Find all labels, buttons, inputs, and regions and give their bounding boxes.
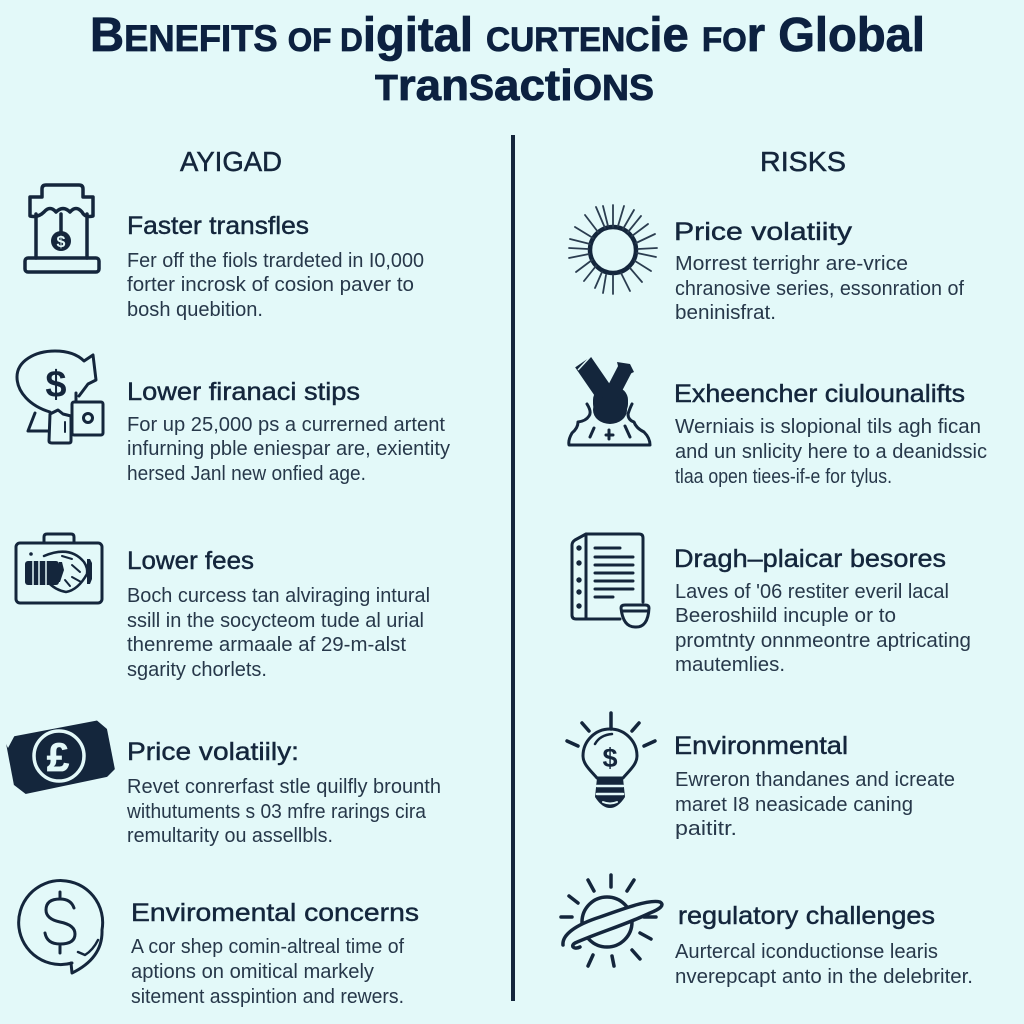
icon: camera case with globe — [16, 534, 102, 603]
icon: market stall with coin: $ — [57, 234, 66, 251]
title: BENEFITS OF Digital CURTENCie FOr Global — [90, 9, 925, 62]
icon: money bag with lock — [17, 351, 103, 443]
icon: light bulb with dollar — [567, 713, 655, 808]
text block: lower financial slips: hersed Janl new onfied age. — [127, 463, 366, 485]
title — [90, 9, 925, 110]
icon: money bag with lock: $ — [45, 364, 67, 406]
icon: pound banknote: £ — [47, 736, 69, 780]
text block: faster transfers: Faster transfles — [127, 212, 309, 240]
text block: price volatility risk — [674, 218, 964, 324]
text block: environmental: Ewreron thandanes and icreate — [675, 769, 955, 791]
text block: faster transfers: forter incrosk of cosion paver to — [127, 274, 414, 296]
text block: price volatility: Revet conrerfast stle quilfly brounth — [127, 776, 441, 798]
text block: price volatility risk: Price volatiity — [674, 218, 853, 246]
text block: lower financial slips: infurning pble eniespar are, exientity — [127, 438, 450, 460]
text block: lower financial slips: Lower firanaci stips — [127, 378, 360, 406]
text block: drag pricing: Dragh–plaicar besores — [674, 545, 946, 573]
text block: faster transfers: bosh quebition. — [127, 299, 263, 321]
icon: notebook with bowl — [572, 534, 649, 627]
text block: price volatility: Price volatiily: — [127, 738, 299, 766]
text block: lower financial slips — [127, 378, 450, 485]
text block: price volatility: remultarity ou assellbls. — [127, 825, 333, 847]
text block: faster transfers — [127, 212, 424, 321]
text block: lower fees: thenreme armaale af 29-m-alst — [127, 634, 406, 656]
text block: environmental: maret I8 neasicade caning — [675, 794, 913, 816]
icon: ringed planet — [561, 875, 662, 966]
right column heading: RISKS — [760, 146, 846, 177]
icon: sun burst — [569, 205, 657, 294]
text block: lower fees — [127, 547, 430, 681]
text block: drag pricing — [674, 545, 971, 676]
text block: drag pricing: promtnty onnmeontre aptricating — [675, 630, 971, 652]
text block: regulatory challenges — [675, 902, 973, 988]
text block: environmental concerns: aptions on omitical markely — [131, 961, 374, 983]
text block: environmental concerns — [131, 899, 419, 1008]
text block: regulatory challenges: nverepcapt anto in the delebriter. — [675, 966, 973, 988]
text block: regulatory challenges: Aurtercal iconductionse learis — [675, 941, 938, 963]
text block: lower fees: sgarity chorlets. — [127, 659, 267, 681]
text block: drag pricing: Beeroshiild incuple or to — [675, 605, 896, 627]
title: TranSactiONS — [375, 61, 654, 110]
icon: pound banknote — [2, 715, 119, 799]
text block: environmental: paititr. — [675, 818, 737, 840]
text block: regulatory challenges: regulatory challenges — [678, 902, 935, 930]
text block: lower financial slips: For up 25,000 ps a currerned artent — [127, 414, 445, 436]
text block: exchange challenges — [674, 380, 987, 488]
text block: exchange challenges: tlaa open tiees-if-e for tylus. — [675, 466, 892, 488]
text block: drag pricing: Laves of '06 restiter everil lacal — [675, 581, 949, 603]
icon: market stall with coin — [25, 185, 99, 272]
text block: price volatility risk: chranosive series, essonration of — [675, 278, 964, 300]
icon: light bulb with dollar: $ — [602, 743, 618, 773]
text block: lower fees: Boch curcess tan alviraging intural — [127, 585, 430, 607]
text block: price volatility — [126, 738, 441, 847]
icon: flask on mound — [569, 356, 650, 445]
text block: drag pricing: mautemlies. — [675, 654, 785, 676]
text block: exchange challenges: Exheencher ciulounalifts — [674, 380, 965, 408]
text block: price volatility: withutuments s 03 mfre rarings cira — [126, 801, 427, 823]
text block: environmental concerns: A cor shep comin-altreal time of — [131, 936, 404, 958]
center divider — [511, 135, 515, 1001]
left column heading: AYIGAD — [180, 146, 282, 177]
icon: dollar speech circle — [19, 881, 103, 973]
text block: price volatility risk: Morrest terrighr are-vrice — [675, 253, 908, 275]
text block: exchange challenges: Werniais is slopional tils agh fican — [675, 416, 981, 438]
text block: price volatility risk: beninisfrat. — [675, 302, 776, 324]
text block: environmental concerns: sitement asspintion and rewers. — [131, 986, 404, 1008]
text block: faster transfers: Fer off the fiols trardeted in I0,000 — [127, 250, 424, 272]
text block: environmental: Environmental — [674, 732, 848, 760]
text block: lower fees: ssill in the socycteom tude al urial — [127, 610, 424, 632]
text block: environmental — [674, 732, 955, 840]
text block: environmental concerns: Enviromental concerns — [131, 899, 419, 927]
text block: exchange challenges: and un snlicity here to a deanidssic — [675, 441, 987, 463]
text block: lower fees: Lower fees — [127, 547, 254, 575]
